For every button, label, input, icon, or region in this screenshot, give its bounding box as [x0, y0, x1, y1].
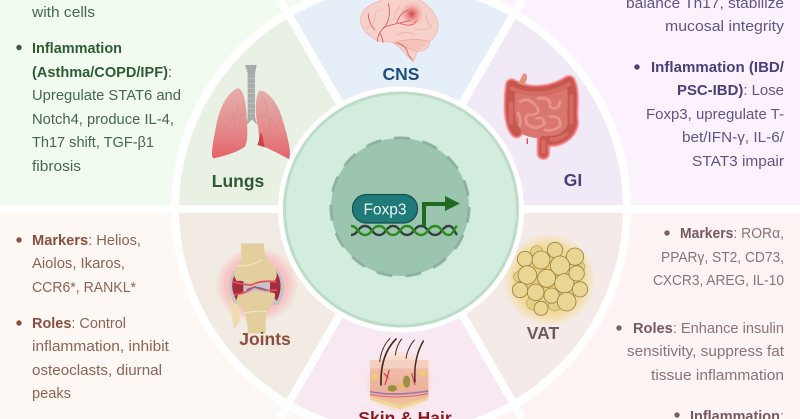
text block: VAT panel: sensitivity, suppress fat	[627, 344, 784, 360]
Foxp3 pill: Foxp3	[363, 202, 407, 218]
text block: VAT panel: Markers: RORα,	[680, 226, 784, 242]
label: VAT: VAT	[527, 323, 560, 343]
text block: lungs panel	[16, 5, 181, 175]
text block: lungs panel: Th17 shift, TGF-β1	[32, 135, 154, 151]
text block: joints panel: osteoclasts, diurnal	[32, 363, 162, 379]
text block: GI panel	[626, 0, 785, 170]
text block: GI panel: mucosal integrity	[665, 19, 785, 35]
text block: GI panel: PSC-IBD): Lose	[677, 83, 784, 99]
text block: joints panel: Aiolos, Ikaros,	[32, 256, 125, 272]
text block: lungs panel: Notch4, produce IL-4,	[32, 112, 174, 128]
text block: joints panel: CCR6*, RANKL*	[32, 280, 136, 296]
text block: VAT panel	[616, 226, 784, 419]
panel: lungs background	[0, 0, 400, 205]
text block: VAT panel: tissue inflammation	[651, 368, 784, 384]
icon: DNA strand	[351, 226, 457, 235]
panel: joints background	[0, 213, 400, 419]
text block: joints panel: Markers: Helios,	[32, 233, 141, 249]
text block: GI panel: STAT3 impair	[692, 154, 784, 170]
text block: joints panel	[16, 233, 169, 402]
sector: VAT	[401, 209, 623, 401]
label: CNS: CNS	[383, 64, 419, 84]
panel: VAT background	[400, 213, 800, 419]
text block: lungs panel: Inflammation	[32, 41, 122, 57]
text block: lungs panel: Upregulate STAT6 and	[32, 88, 181, 104]
text block: GI panel: Foxp3, upregulate T-	[646, 107, 784, 123]
text block: VAT panel: CXCR3, AREG, IL-10	[653, 273, 784, 289]
icon: fat cells	[503, 233, 596, 327]
text block: joints panel: Roles: Control	[32, 316, 126, 332]
text block: lungs panel: fibrosis	[32, 159, 81, 175]
label: Joints: Joints	[239, 329, 291, 349]
text block: VAT panel: Roles: Enhance insulin	[633, 321, 784, 337]
icon: transcription arrow	[424, 196, 460, 226]
inner dashed circle	[331, 138, 469, 276]
icon: lungs	[212, 65, 290, 159]
sector: Skin and Hair	[290, 209, 512, 419]
text block: lungs panel: with cells	[31, 5, 95, 21]
Foxp3 pill	[352, 194, 418, 223]
text block: GI panel: Inflammation (IBD/	[651, 60, 784, 76]
icon: intestines	[510, 73, 572, 153]
label: GI: GI	[564, 170, 582, 190]
sector: CNS	[290, 0, 512, 209]
text block: joints panel: inflammation, inhibit	[32, 339, 169, 355]
text block: joints panel: peaks	[32, 386, 71, 402]
text block: lungs panel: (Asthma/COPD/IPF):	[32, 65, 172, 81]
sector: GI	[401, 17, 623, 209]
panel: GI background	[400, 0, 800, 205]
icon: skin and hair	[364, 338, 434, 413]
icon: brain	[361, 0, 438, 62]
central circle	[278, 86, 524, 332]
sector: Joints	[179, 209, 401, 401]
text block: VAT panel: PPARγ, ST2, CD73,	[661, 250, 784, 266]
icon: joint	[215, 243, 298, 333]
text block: GI panel: bet/IFN-γ, IL-6/	[682, 130, 785, 146]
label: Lungs: Lungs	[212, 171, 265, 191]
sector: Lungs	[179, 17, 401, 209]
